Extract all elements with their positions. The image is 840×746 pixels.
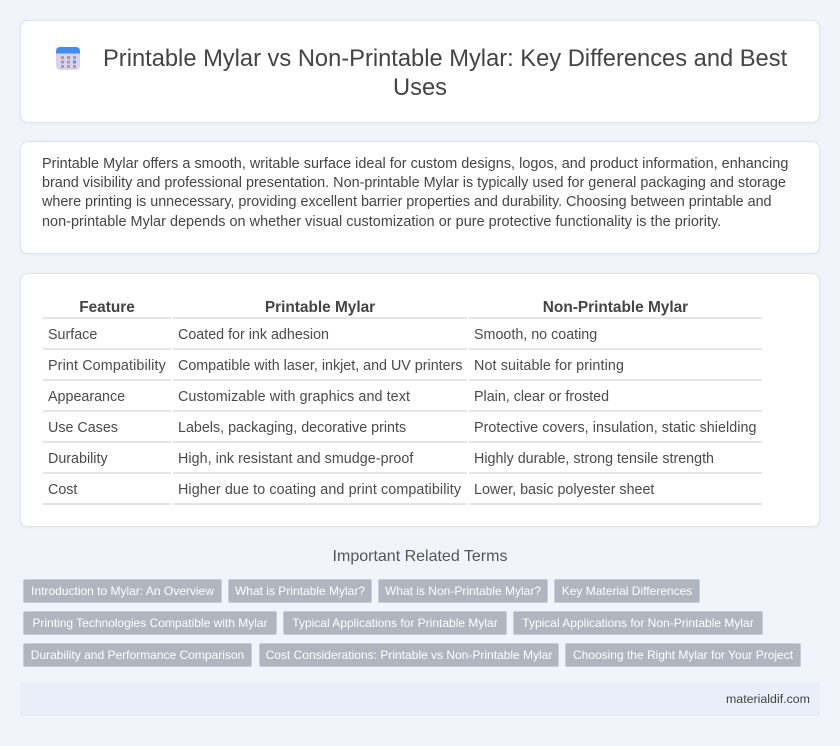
related terms heading: Important Related Terms bbox=[333, 548, 507, 565]
tag bbox=[513, 611, 763, 635]
row: Surface: Surface bbox=[48, 327, 97, 343]
intro paragraph: brand visibility and professional presentation. Non-printable Mylar is typically used for general packaging and storage bbox=[42, 175, 786, 191]
title: Printable Mylar vs Non-Printable Mylar: Key Differences and Best bbox=[103, 46, 787, 72]
intro paragraph bbox=[42, 156, 788, 230]
text: Customizable with graphics and text bbox=[178, 389, 410, 405]
text: Compatible with laser, inkjet, and UV printers bbox=[178, 358, 462, 374]
footer bar bbox=[20, 682, 820, 716]
tag: Printing Technologies Compatible with Mylar bbox=[32, 616, 268, 630]
row: Print Compatibility: Print Compatibility bbox=[48, 358, 166, 374]
row: Use Cases: Use Cases bbox=[48, 420, 118, 436]
intro panel bbox=[20, 141, 820, 254]
text: Protective covers, insulation, static shielding bbox=[474, 420, 757, 436]
title bbox=[103, 46, 788, 101]
text: Labels, packaging, decorative prints bbox=[178, 420, 406, 436]
tag: What is Printable Mylar? bbox=[235, 584, 365, 598]
text: Coated for ink adhesion bbox=[178, 327, 329, 343]
tag bbox=[378, 579, 548, 603]
tag bbox=[259, 643, 559, 667]
row: Appearance: Appearance bbox=[48, 389, 125, 405]
icon: calendar bbox=[56, 47, 80, 70]
tag bbox=[228, 579, 372, 603]
tag: Key Material Differences bbox=[562, 584, 692, 598]
column header: Printable Mylar: Printable Mylar bbox=[265, 299, 375, 316]
source credit: materialdif.com bbox=[726, 692, 810, 706]
tag: Cost Considerations: Printable vs Non-Printable Mylar bbox=[266, 648, 552, 662]
tag: Typical Applications for Non-Printable Mylar bbox=[522, 616, 754, 630]
text: Not suitable for printing bbox=[474, 358, 624, 374]
tag: What is Non-Printable Mylar? bbox=[385, 584, 541, 598]
column header: Feature: Feature bbox=[79, 299, 135, 316]
text: Plain, clear or frosted bbox=[474, 389, 609, 405]
tag: Typical Applications for Printable Mylar bbox=[292, 616, 498, 630]
text: Higher due to coating and print compatibility bbox=[178, 482, 461, 498]
tag bbox=[23, 643, 252, 667]
tag bbox=[554, 579, 700, 603]
tag bbox=[565, 643, 801, 667]
tag: Introduction to Mylar: An Overview bbox=[31, 584, 214, 598]
header panel bbox=[20, 20, 820, 123]
text: Smooth, no coating bbox=[474, 327, 597, 343]
text: High, ink resistant and smudge-proof bbox=[178, 451, 413, 467]
tag bbox=[23, 579, 222, 603]
comparison table panel bbox=[20, 273, 820, 527]
intro paragraph: where printing is unnecessary, providing excellent barrier properties and durability. Choosing between printable and bbox=[42, 194, 772, 210]
tag: Choosing the Right Mylar for Your Project bbox=[573, 648, 793, 662]
text: Highly durable, strong tensile strength bbox=[474, 451, 714, 467]
title: Uses bbox=[393, 75, 447, 101]
text: Lower, basic polyester sheet bbox=[474, 482, 654, 498]
tag bbox=[283, 611, 507, 635]
tag bbox=[23, 611, 277, 635]
tags: related terms bbox=[23, 579, 801, 667]
row: Cost: Cost bbox=[48, 482, 77, 498]
intro paragraph: non-printable Mylar depends on whether visual customization or pure protective functionality is the priority. bbox=[42, 214, 721, 230]
column header: Non-Printable Mylar: Non-Printable Mylar bbox=[543, 299, 688, 316]
intro paragraph: Printable Mylar offers a smooth, writable surface ideal for custom designs, logos, and product information, enhancing bbox=[42, 156, 788, 172]
row: Durability: Durability bbox=[48, 451, 108, 467]
tag: Durability and Performance Comparison bbox=[31, 648, 244, 662]
